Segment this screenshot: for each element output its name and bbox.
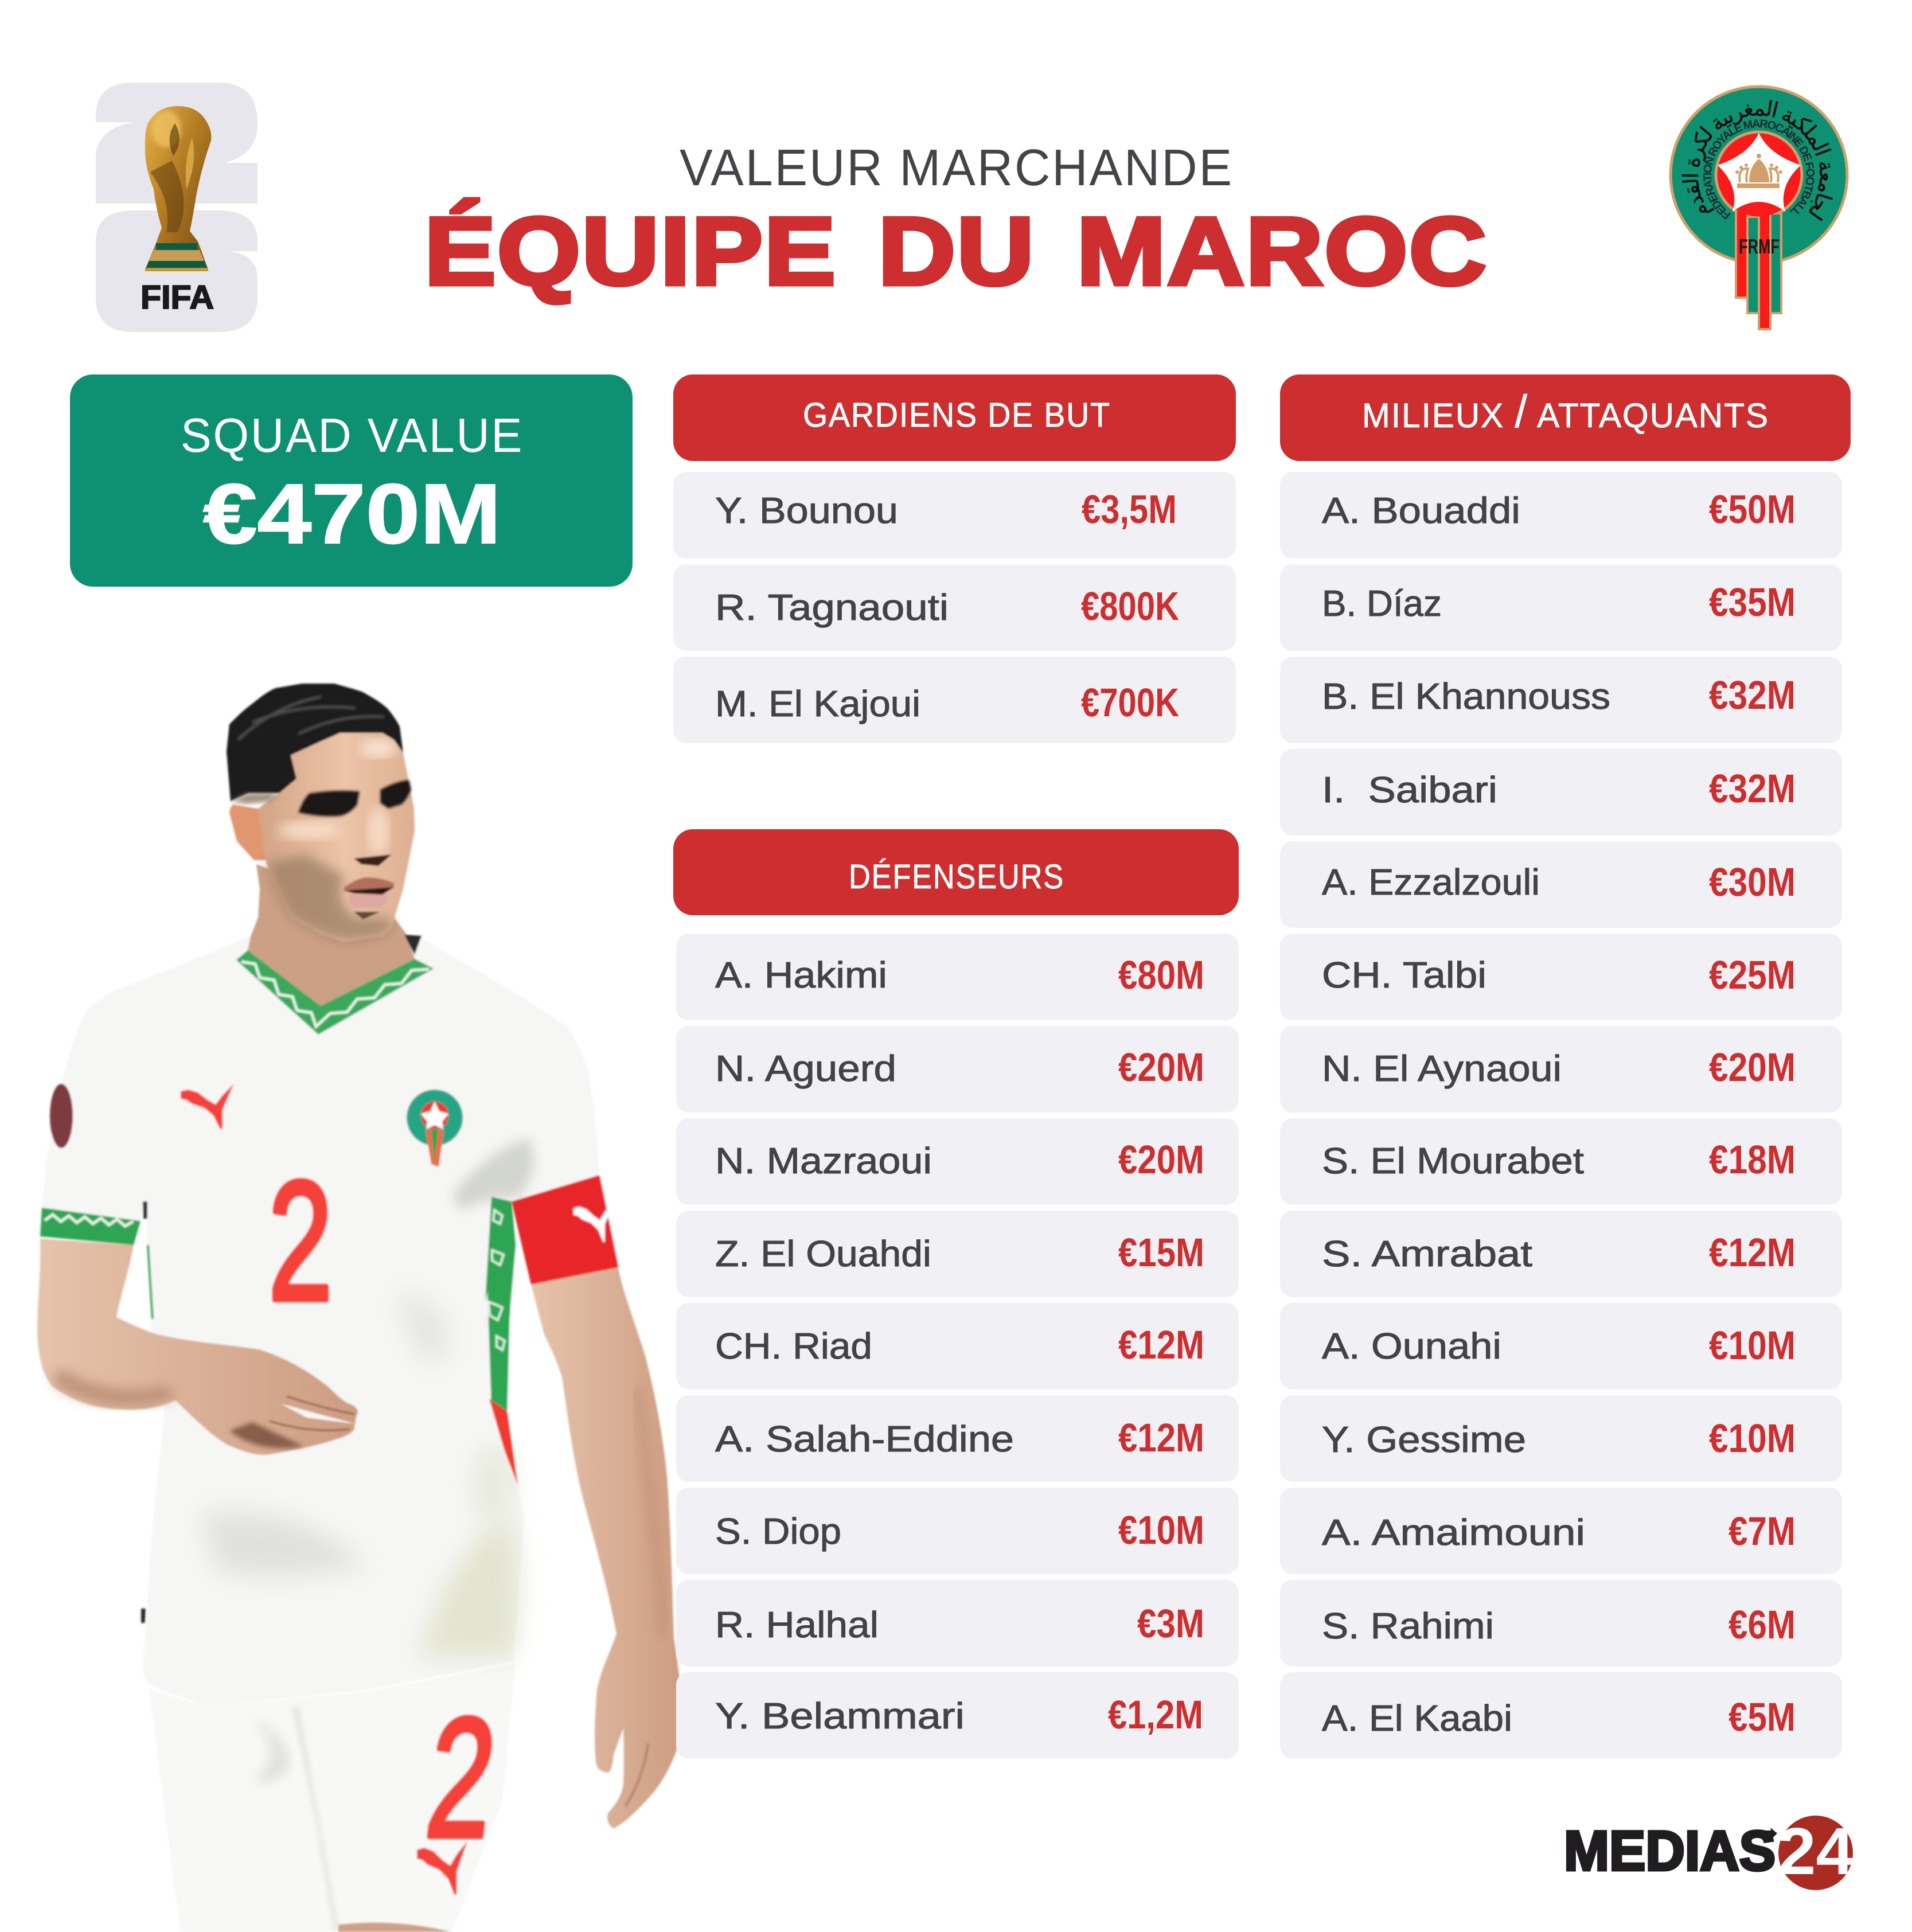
crest: ribbons — [1735, 211, 1782, 330]
row: N. Mazraoui: N. Mazraoui — [715, 1140, 932, 1181]
row: M. El Kajoui — [673, 657, 1236, 743]
row: A. Bouaddi: A. Bouaddi — [1322, 490, 1520, 531]
player: jersey — [40, 936, 618, 1707]
row: B. Díaz — [1280, 564, 1842, 651]
row: N. El Aynaoui: N. El Aynaoui — [1322, 1048, 1562, 1089]
row: R. Halhal — [676, 1580, 1239, 1666]
row: B. Díaz: B. Díaz — [1322, 583, 1442, 624]
row: A. Hakimi — [676, 934, 1239, 1020]
player: neck — [248, 864, 415, 1006]
player: shorts number: 2 — [419, 1683, 504, 1872]
row: Y. Belammari: Y. Belammari — [715, 1695, 965, 1736]
row: Y. Gessime: €10M — [1709, 1416, 1796, 1461]
row: S. Rahimi: €6M — [1728, 1602, 1796, 1647]
row: CH. Talbi: CH. Talbi — [1322, 954, 1486, 996]
row: Z. El Ouahdi — [676, 1211, 1239, 1297]
player: right arm — [531, 1267, 682, 1828]
player: ear — [229, 805, 266, 860]
player: hair — [227, 684, 403, 804]
row: Z. El Ouahdi: Z. El Ouahdi — [715, 1233, 931, 1274]
row: A. Bouaddi — [1280, 472, 1842, 559]
logo: FIFA World Cup 26 — [96, 83, 257, 332]
player: armband — [512, 1175, 618, 1285]
heading: gardiens de but: GARDIENS DE BUT — [803, 396, 1111, 434]
panel: défenseurs — [673, 829, 1239, 1759]
player: face — [258, 733, 415, 942]
row: Y. Bounou: €3,5M — [1082, 487, 1177, 532]
row: A. Salah-Eddine: A. Salah-Eddine — [715, 1418, 1014, 1459]
row: A. Ezzalzouli: A. Ezzalzouli — [1322, 861, 1540, 903]
row: S. Amrabat: €12M — [1709, 1230, 1796, 1275]
row: A. El Kaabi: €5M — [1728, 1695, 1796, 1739]
player: left arm and hand — [37, 1239, 358, 1455]
player: side panel — [485, 1197, 516, 1411]
row: S. Diop: €10M — [1118, 1508, 1204, 1552]
row: B. El Khannouss: €32M — [1709, 673, 1796, 717]
row: S. Amrabat — [1280, 1211, 1842, 1297]
title: equipe du maroc: ÉQUIPE DU MAROC — [424, 197, 1488, 305]
row: A. Amaimouni — [1280, 1488, 1842, 1574]
heading: défenseurs — [673, 829, 1239, 915]
icon: chest puma — [181, 1084, 234, 1129]
row: M. El Kajoui: M. El Kajoui — [715, 683, 920, 724]
crest: crown — [1735, 154, 1782, 188]
badge: sleeve patch — [50, 1084, 73, 1148]
row: S. Diop: S. Diop — [715, 1511, 841, 1552]
row: S. El Mourabet: S. El Mourabet — [1322, 1140, 1584, 1181]
row: A. Amaimouni: A. Amaimouni — [1322, 1512, 1585, 1553]
row: S. El Mourabet — [1280, 1118, 1842, 1205]
heading: défenseurs: DÉFENSEURS — [849, 857, 1064, 896]
row: A. Ounahi: A. Ounahi — [1322, 1325, 1501, 1367]
player: mouth — [344, 877, 394, 919]
row: R. Tagnaouti — [673, 564, 1236, 651]
row: R. Tagnaouti: R. Tagnaouti — [715, 587, 949, 628]
row: S. Rahimi: S. Rahimi — [1322, 1605, 1494, 1646]
logo: numerals 26 backdrop — [96, 83, 257, 332]
row: CH. Talbi — [1280, 934, 1842, 1020]
title: valeur marchande: VALEUR MARCHANDE — [680, 139, 1234, 197]
row: N. El Aynaoui: €20M — [1709, 1045, 1796, 1090]
player: nose shadow — [354, 854, 392, 866]
player: jersey number: 2 — [268, 1146, 333, 1336]
row: A. Amaimouni: €7M — [1728, 1509, 1796, 1554]
row: N. Aguerd: N. Aguerd — [715, 1048, 896, 1089]
label: squad value: SQUAD VALUE — [181, 408, 524, 462]
row: R. Halhal: R. Halhal — [715, 1604, 879, 1645]
row: I. Saibari — [1280, 749, 1842, 836]
row: B. El Khannouss — [1280, 657, 1842, 743]
icon: shorts puma — [417, 1841, 467, 1895]
row: A. Hakimi: A. Hakimi — [715, 954, 887, 996]
logo: MEDIAS wordmark: MEDIAS — [1564, 1819, 1776, 1882]
row: R. Tagnaouti: €800K — [1081, 584, 1179, 629]
logo: red disc — [1778, 1816, 1853, 1890]
row: N. Mazraoui — [676, 1118, 1239, 1205]
row: Y. Belammari: €1,2M — [1108, 1692, 1203, 1737]
panel: squad value — [70, 374, 633, 587]
crest: FRMF initials: FRMF — [1739, 235, 1780, 258]
wordmark: FIFA: FIFA — [141, 279, 214, 316]
player: eyebrows and eyes — [298, 780, 411, 817]
row: A. Salah-Eddine: €12M — [1118, 1415, 1204, 1460]
row: Y. Gessime — [1280, 1395, 1842, 1482]
row: S. El Mourabet: €18M — [1709, 1137, 1796, 1182]
icon: arrow on S — [1763, 1828, 1777, 1839]
row: A. Ounahi: €10M — [1709, 1323, 1796, 1368]
row: CH. Riad: CH. Riad — [715, 1325, 872, 1367]
row: S. Rahimi — [1280, 1580, 1842, 1666]
row: B. El Khannouss: B. El Khannouss — [1322, 676, 1610, 717]
player: shorts — [149, 1664, 516, 1932]
row: CH. Riad: €12M — [1118, 1322, 1204, 1367]
crest: french lettering: FEDERATION ROYALE MAROCAINE DE FOOTBALL — [1703, 119, 1815, 220]
number: total value: €470M — [203, 467, 501, 561]
row: N. El Aynaoui — [1280, 1026, 1842, 1113]
player: sleeve cuff — [40, 1208, 141, 1245]
row: CH. Riad — [676, 1303, 1239, 1390]
row: A. Hakimi: €80M — [1118, 953, 1204, 997]
crest: red medallion and star — [1716, 132, 1802, 218]
row: B. Díaz: €35M — [1709, 580, 1796, 625]
row: I. Saibari: I. Saibari — [1322, 769, 1497, 810]
badge: morocco crest on jersey — [407, 1090, 463, 1167]
heading: gardiens de but — [673, 374, 1236, 461]
logo: Medias24 — [1564, 1814, 1854, 1890]
row: N. Aguerd: €20M — [1118, 1045, 1204, 1090]
row: R. Halhal: €3M — [1137, 1601, 1204, 1646]
row: M. El Kajoui: €700K — [1081, 680, 1179, 725]
row: CH. Talbi: €25M — [1709, 953, 1796, 997]
row: I. Saibari: €32M — [1709, 766, 1796, 811]
row: A. El Kaabi — [1280, 1672, 1842, 1759]
row: Y. Belammari — [676, 1672, 1239, 1759]
row: A. Ezzalzouli — [1280, 841, 1842, 928]
logo: 24 numerals: 24 — [1778, 1814, 1854, 1888]
row: S. Amrabat: S. Amrabat — [1322, 1233, 1532, 1274]
logo: FRMF crest — [1669, 85, 1849, 330]
crest: green disc — [1671, 87, 1847, 263]
row: Z. El Ouahdi: €15M — [1118, 1230, 1204, 1275]
row: A. Ezzalzouli: €30M — [1709, 860, 1796, 904]
row: A. El Kaabi: A. El Kaabi — [1322, 1697, 1512, 1739]
player: jersey collar — [236, 935, 434, 1035]
row: Y. Gessime: Y. Gessime — [1322, 1419, 1526, 1460]
row: Y. Bounou — [673, 472, 1236, 559]
row: S. Diop — [676, 1488, 1239, 1574]
row: A. Bouaddi: €50M — [1709, 487, 1796, 532]
heading: milieux / attaquants: MILIEUX / ATTAQUANTS — [1362, 386, 1769, 437]
heading: milieux / attaquants — [1280, 374, 1851, 461]
player photo: Achraf Hakimi — [37, 684, 682, 1932]
panel: gardiens de but — [673, 374, 1236, 743]
panel: milieux et attaquants — [1280, 374, 1851, 1759]
icon: World Cup trophy — [145, 106, 211, 271]
row: A. Salah-Eddine — [676, 1395, 1239, 1482]
row: Y. Bounou: Y. Bounou — [715, 490, 898, 531]
row: A. Ounahi — [1280, 1303, 1842, 1390]
row: N. Aguerd — [676, 1026, 1239, 1113]
row: N. Mazraoui: €20M — [1118, 1137, 1204, 1182]
